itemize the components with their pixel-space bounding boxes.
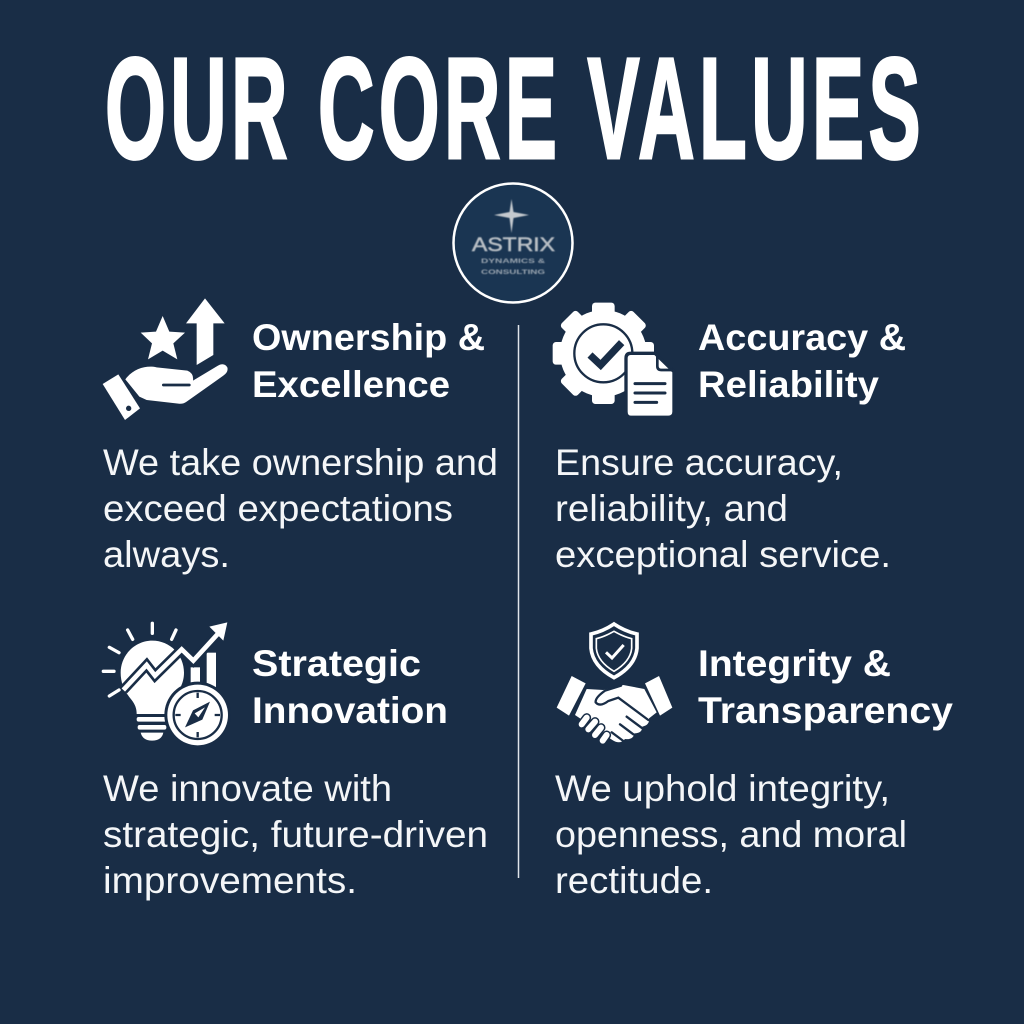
heading: Integrity & <box>698 643 891 684</box>
panel: accuracy and reliability: Reliability <box>698 364 879 405</box>
text block: openness, and moral <box>555 814 907 855</box>
panel: ownership and excellence <box>103 298 498 575</box>
text block: exceptional service. <box>555 534 891 575</box>
icon: gear with check and document <box>553 303 674 417</box>
text block: strategic, future-driven <box>103 814 488 855</box>
text block: reliability, and <box>555 488 788 529</box>
icon: shield <box>591 624 637 678</box>
logo: Astrix Dynamics & Consulting <box>454 184 572 302</box>
text block <box>555 768 907 901</box>
text block <box>103 442 498 575</box>
text block: exceed expectations <box>103 488 453 529</box>
panel: accuracy and reliability <box>553 303 906 575</box>
heading: Ownership & <box>252 317 485 358</box>
text block: Ensure accuracy, <box>555 442 843 483</box>
panel: strategic innovation <box>103 622 488 901</box>
text block: rectitude. <box>555 860 713 901</box>
panel: integrity and transparency <box>555 624 953 901</box>
heading: Accuracy & <box>698 317 906 358</box>
text block <box>103 768 488 901</box>
text block: We innovate with <box>103 768 392 809</box>
logo: Astrix Dynamics & Consulting: DYNAMICS & <box>481 258 545 265</box>
panel: strategic innovation: Innovation <box>252 690 448 731</box>
icon: handshake <box>557 676 672 742</box>
icon: hand with star and arrow <box>103 298 228 420</box>
text block: We uphold integrity, <box>555 768 890 809</box>
logo: Astrix Dynamics & Consulting: ASTRIX <box>472 234 555 256</box>
heading: Strategic <box>252 643 421 684</box>
text block <box>555 442 891 575</box>
icon: light bulb with growth arrow and compass <box>103 622 231 748</box>
text block: improvements. <box>103 860 357 901</box>
text block: We take ownership and <box>103 442 498 483</box>
logo: Astrix Dynamics & Consulting: CONSULTING <box>481 269 545 276</box>
text block: always. <box>103 534 230 575</box>
panel: integrity and transparency: Transparency <box>698 690 953 731</box>
panel: ownership and excellence: Excellence <box>252 364 450 405</box>
